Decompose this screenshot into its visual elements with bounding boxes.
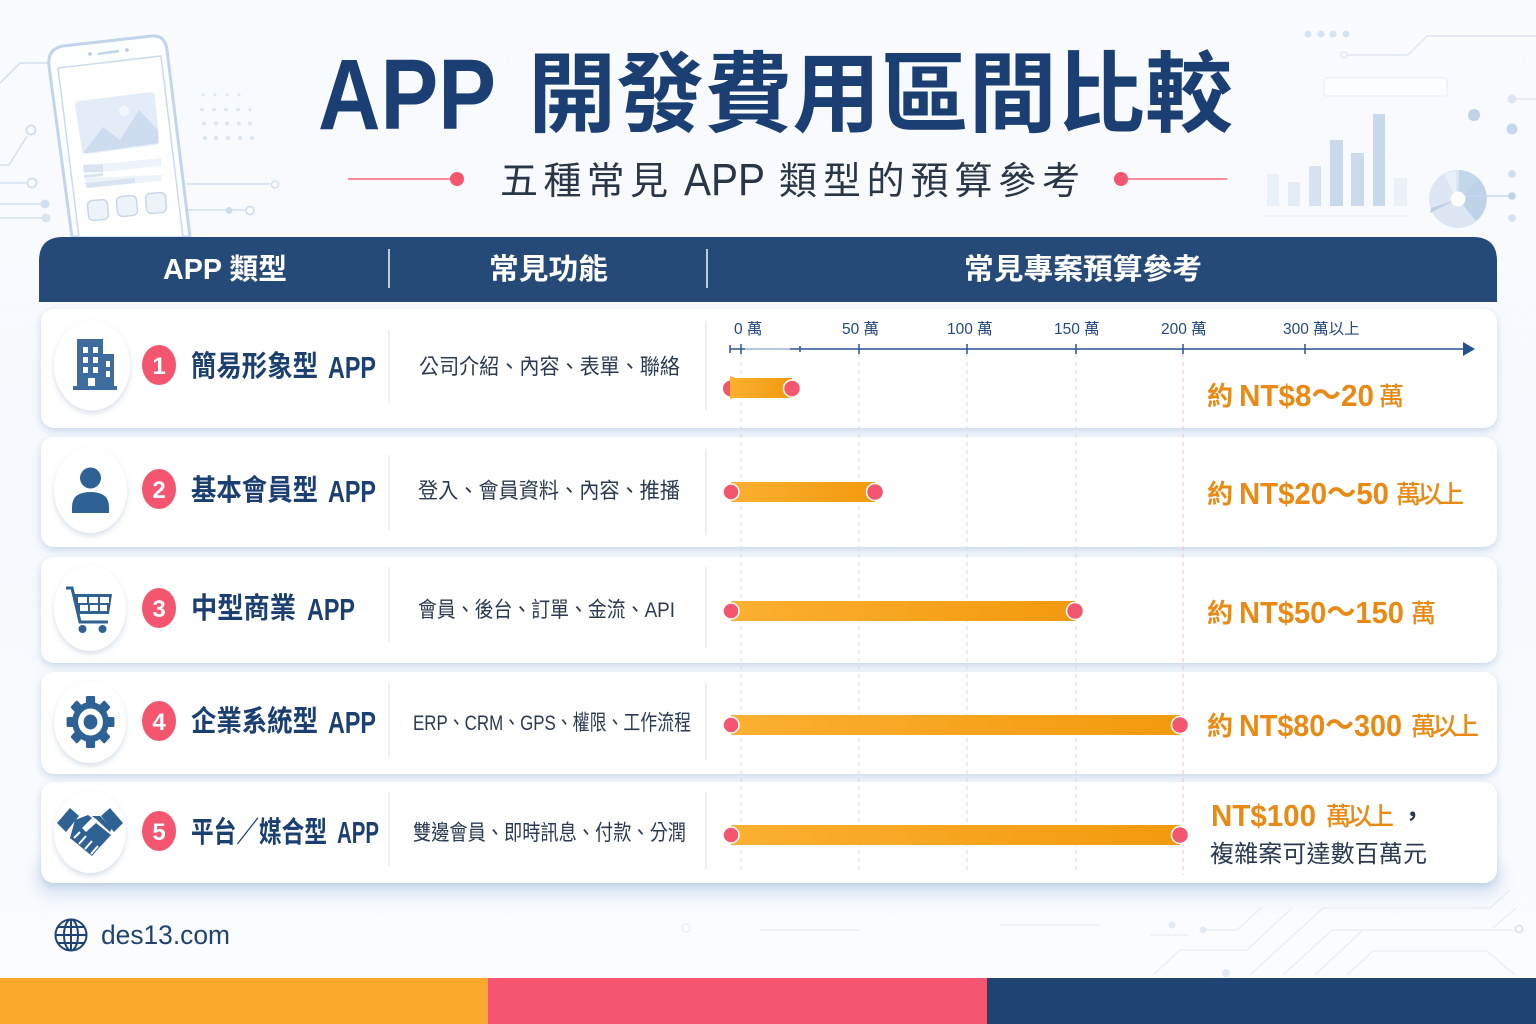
row 2 name: APP <box>328 474 376 509</box>
row 3: mid business app <box>54 566 1436 651</box>
row 4 name: 企業系統型 <box>191 705 318 738</box>
budget axis <box>730 320 1475 356</box>
row 5 features: 雙邊會員、即時訊息、付款、分潤 <box>413 821 686 845</box>
budget axis: 50 萬 <box>842 320 879 338</box>
icon: gear <box>54 681 126 763</box>
row 1 price: 萬 <box>1379 383 1404 411</box>
row 1 price: 約 <box>1207 381 1233 411</box>
budget axis: 300 萬以上 <box>1283 320 1360 338</box>
table header: 常見專案預算參考 <box>964 253 1202 286</box>
row 2: basic member app <box>54 447 1464 533</box>
number badge 2: 2 <box>152 477 166 504</box>
row 1 name: APP <box>328 350 376 385</box>
budget axis: 200 萬 <box>1161 320 1207 338</box>
subtitle with side rules: APP <box>684 154 765 205</box>
panel: row 3 background <box>41 557 1497 663</box>
budget axis: 0 萬 <box>734 320 762 338</box>
row 3 name: 中型商業 <box>191 592 296 625</box>
icon: user <box>54 447 127 533</box>
table header: APP 類型 <box>163 253 287 286</box>
website link: des13.com <box>101 920 230 950</box>
panel: row 2 background <box>41 437 1497 547</box>
grid lines <box>741 354 1183 875</box>
icon: building <box>54 320 130 410</box>
column dividers <box>389 321 706 870</box>
row 5 price: 複雜案可達數百萬元 <box>1210 841 1427 868</box>
row 3 features: 會員、後台、訂單、金流、API <box>418 598 675 622</box>
row 4 price <box>1207 708 1479 743</box>
circuit dots <box>1168 922 1230 977</box>
row 1: simple brand app <box>54 320 1404 413</box>
row 3 price: 萬 <box>1411 600 1436 628</box>
illustration: phone wireframe with circuit lines <box>0 36 278 237</box>
row 4 price: 約 <box>1207 711 1233 741</box>
row 5 budget bar <box>723 825 1188 845</box>
row 5 price: 萬以上 <box>1326 803 1394 831</box>
row 2 name: 基本會員型 <box>191 474 318 507</box>
title: 開發費用區間比較 <box>528 45 1233 144</box>
row 5 name: APP <box>337 815 379 850</box>
panel: row 5 background <box>41 782 1497 883</box>
row 2 budget bar <box>723 482 884 502</box>
row 1 budget bar <box>723 376 800 399</box>
row 4 budget bar <box>723 715 1188 735</box>
row 4 features: ERP、CRM、GPS、權限、工作流程 <box>413 711 691 735</box>
number badge 4 <box>142 701 176 741</box>
number badge 3 <box>142 588 176 628</box>
subtitle with side rules: 類型的預算參考 <box>779 161 1080 203</box>
illustration: chart and circuit decoration <box>1262 30 1536 228</box>
budget axis: 100 萬 <box>947 320 993 338</box>
row 4 price: NT$80～300 <box>1239 708 1402 743</box>
footer color band <box>0 978 1536 1024</box>
row 3 budget bar <box>723 601 1084 621</box>
row 1 price: NT$8～20 <box>1239 378 1374 413</box>
subtitle with side rules: 五種常見 <box>500 161 668 203</box>
row 5 price <box>1210 798 1427 868</box>
row 5 price: NT$100 <box>1211 798 1316 833</box>
budget axis: 150 萬 <box>1054 320 1100 338</box>
icon: globe <box>56 920 86 950</box>
panel: row 4 background <box>41 672 1497 774</box>
row 5 name: 平台／媒合型 <box>191 815 327 849</box>
row 2 price <box>1207 476 1464 511</box>
title: APP <box>318 39 496 151</box>
row 4 name: APP <box>328 705 376 740</box>
row 1 features: 公司介紹、內容、表單、聯絡 <box>419 355 680 379</box>
number badge 4: 4 <box>152 709 166 736</box>
row 3 name <box>191 592 355 627</box>
row 4 price: 萬以上 <box>1411 713 1479 741</box>
row 3 price: NT$50～150 <box>1239 595 1404 630</box>
number badge 1 <box>142 345 176 385</box>
icon: handshake <box>54 791 126 873</box>
number badge 5: 5 <box>152 819 166 846</box>
row 2 price: 萬以上 <box>1396 481 1464 509</box>
row 3 price: 約 <box>1207 598 1233 628</box>
row 2 features: 登入、會員資料、內容、推播 <box>418 479 680 503</box>
circuit decoration: bottom right <box>682 890 1522 975</box>
row 4: enterprise system app <box>54 681 1479 763</box>
row 5: platform app <box>54 791 1427 873</box>
row 5 price: ， <box>1400 803 1425 831</box>
subtitle with side rules <box>348 154 1227 205</box>
row 2 price: NT$20～50 <box>1239 476 1389 511</box>
table header <box>39 237 1497 302</box>
title <box>318 39 1233 151</box>
row 1 name: 簡易形象型 <box>191 350 318 383</box>
number badge 1: 1 <box>152 353 166 380</box>
row 2 price: 約 <box>1207 479 1233 509</box>
row 3 name: APP <box>307 592 355 627</box>
table header: 常見功能 <box>489 253 608 286</box>
number badge 2 <box>142 469 176 509</box>
table soft shadow <box>36 860 1502 896</box>
number badge 5 <box>142 811 176 851</box>
number badge 3: 3 <box>152 596 166 623</box>
icon: shopping cart <box>54 566 126 651</box>
panel: row 1 background <box>41 309 1497 428</box>
